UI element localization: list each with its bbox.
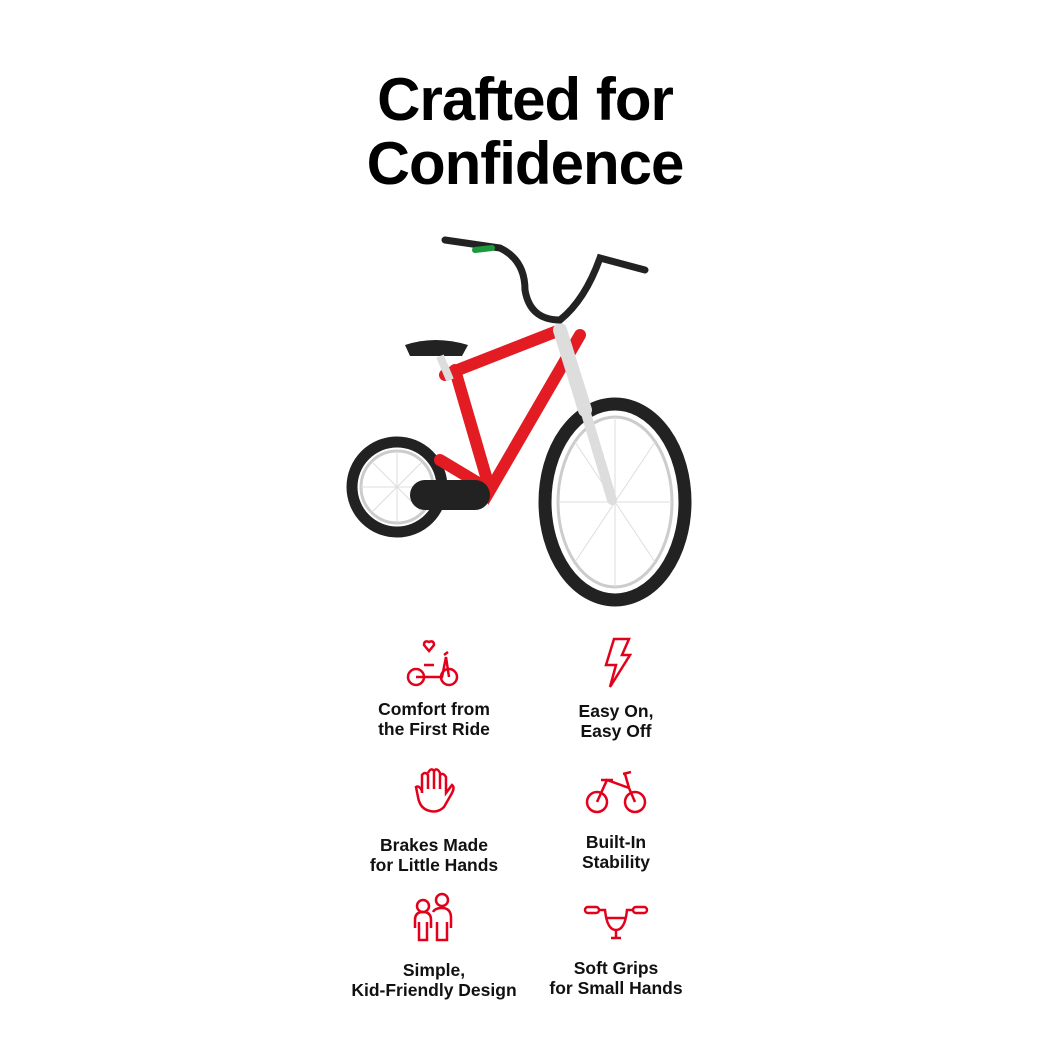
- title: Crafted for: [377, 66, 673, 133]
- feature: comfort: Comfort from: [378, 699, 490, 719]
- feature: brakes: Brakes Made: [380, 835, 488, 855]
- icon: kids: [414, 892, 452, 942]
- rear wheel: [352, 442, 442, 532]
- handlebars: [445, 240, 645, 320]
- title: Confidence: [367, 130, 683, 197]
- feature: stability: Built-In: [586, 832, 646, 852]
- feature: comfort: the First Ride: [378, 719, 490, 739]
- icon: bike: [586, 770, 646, 814]
- icon: hand: [414, 768, 455, 813]
- feature: easy on: Easy Off: [580, 721, 652, 741]
- feature: easy on: Easy On,: [579, 701, 653, 721]
- feature: grips: for Small Hands: [549, 978, 683, 998]
- title: [367, 66, 683, 197]
- feature: brakes: for Little Hands: [370, 855, 498, 875]
- feature: stability: Stability: [582, 852, 650, 872]
- front wheel: [545, 404, 685, 600]
- seat: [405, 340, 468, 380]
- icon: bike heart: [406, 640, 458, 686]
- feature: simple: Simple,: [403, 960, 465, 980]
- feature: stability: [582, 770, 650, 872]
- feature: simple: [351, 892, 517, 1000]
- feature: comfort: [378, 640, 490, 739]
- feature: simple: Kid-Friendly Design: [351, 980, 517, 1000]
- chain guard: [410, 480, 490, 510]
- feature: grips: [549, 906, 683, 998]
- feature: grips: Soft Grips: [574, 958, 658, 978]
- feature: easy on: [579, 638, 653, 741]
- icon: handlebar: [584, 906, 648, 940]
- feature: brakes: [370, 768, 498, 875]
- frame: [440, 330, 612, 500]
- icon: lightning: [604, 638, 632, 688]
- bike image: [346, 236, 692, 606]
